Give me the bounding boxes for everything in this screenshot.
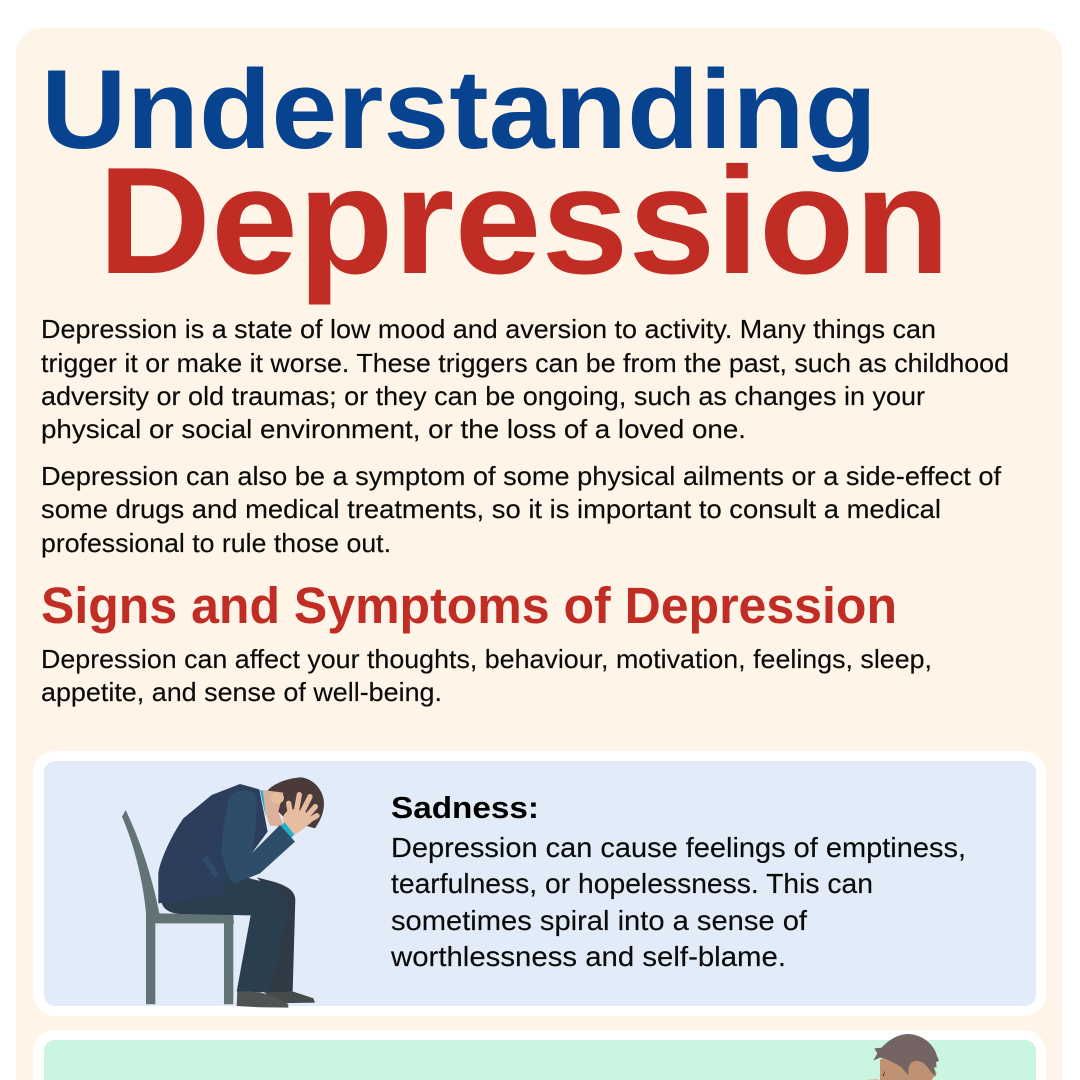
heading: signs and symptoms: Signs and Symptoms of Depression (41, 577, 897, 634)
intro text block: physical or social environment, or the loss of a loved one. (41, 414, 746, 444)
intro text block: professional to rule those out. (41, 528, 391, 558)
cuff (279, 822, 294, 839)
pants (162, 872, 287, 992)
panel: sadness card (33, 751, 1046, 1016)
intro text block: trigger it or make it worse. These triggers can be from the past, such as childhood (41, 348, 1009, 378)
symptoms intro text: Depression can affect your thoughts, behaviour, motivation, feelings, sleep, (41, 644, 932, 674)
hand (289, 795, 317, 821)
icon: man's head, partly visible (865, 1034, 939, 1080)
intro text block (41, 314, 1009, 558)
jacket (158, 784, 268, 903)
title: Understanding (41, 47, 877, 172)
title: Depression (98, 136, 950, 306)
intro text block: Depression can also be a symptom of some physical ailments or a side-effect of (41, 461, 1002, 491)
arm (222, 790, 295, 883)
intro text block: Depression is a state of low mood and aversion to activity. Many things can (41, 314, 936, 344)
rear leg (257, 877, 295, 993)
intro text block: some drugs and medical treatments, so it is important to consult a medical (41, 494, 941, 524)
shirt collar (260, 790, 266, 817)
title (41, 47, 950, 306)
symptoms intro text (41, 644, 932, 707)
text: sadness description: worthlessness and self-blame. (390, 941, 786, 972)
panel: second card, green (33, 1030, 1046, 1080)
neck and face (263, 790, 284, 827)
pocket (202, 855, 219, 878)
hair (267, 777, 324, 828)
text: sadness description: tearfulness, or hopelessness. This can (391, 868, 873, 899)
text: sadness description: sometimes spiral into a sense of (391, 905, 807, 936)
intro text block: adversity or old traumas; or they can be ongoing, such as changes in your (41, 381, 925, 411)
icon: man sitting with head in hands (122, 777, 324, 1008)
text: sadness description: Depression can cause feelings of emptiness, (391, 832, 966, 863)
text: sadness heading: Sadness: (391, 790, 539, 825)
text: sadness description (390, 832, 966, 972)
cheek highlight (271, 792, 284, 804)
chair (122, 810, 234, 1004)
shoes (264, 992, 315, 1003)
symptoms intro text: appetite, and sense of well-being. (41, 677, 442, 707)
